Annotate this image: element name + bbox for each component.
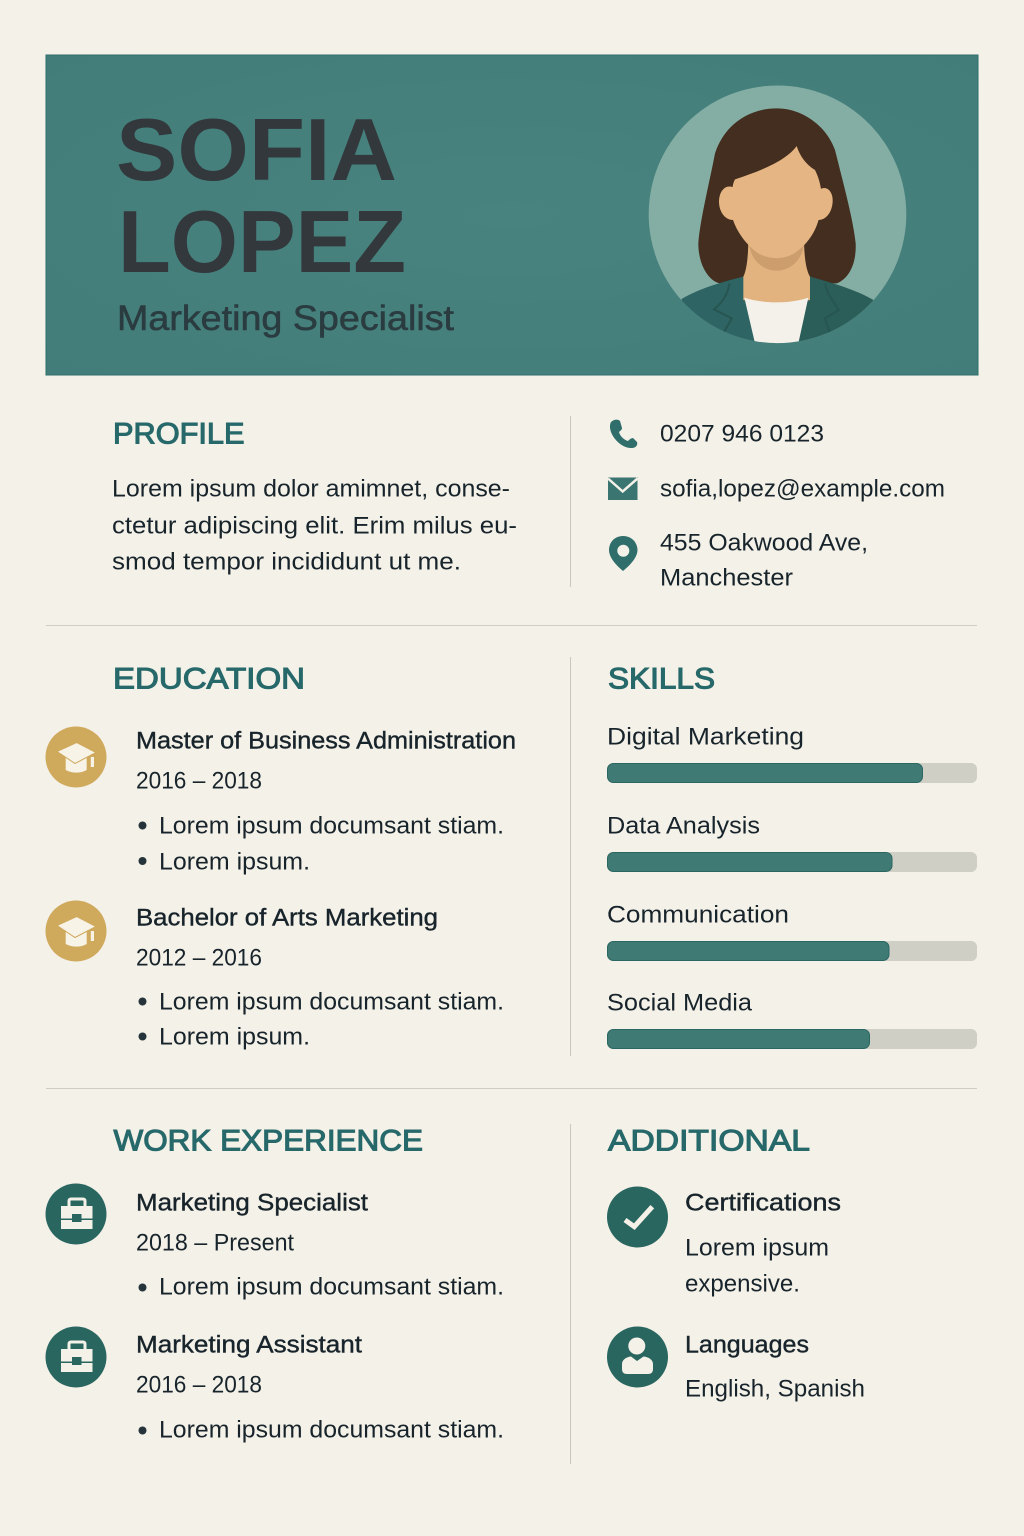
dates: 2012 – 2016 — [136, 944, 262, 971]
skill: communication — [607, 902, 977, 961]
bullet list: Lorem ipsum documsant stiam. — [159, 812, 504, 839]
panel: additional — [607, 1124, 865, 1402]
address: 455 Oakwood Ave, — [660, 530, 868, 557]
education entry: MBA — [46, 726, 516, 875]
profile text — [112, 476, 517, 576]
dates: 2016 – 2018 — [136, 767, 262, 794]
degree title: Bachelor of Arts Marketing — [136, 904, 438, 931]
icon: phone — [610, 420, 637, 448]
profile text: ctetur adipiscing elit. Erim milus eu- — [112, 513, 517, 540]
skill: data analysis: Data Analysis — [607, 812, 760, 840]
bullet list — [138, 988, 504, 1050]
panel: work experience — [46, 1124, 504, 1444]
bullet list: Lorem ipsum. — [159, 848, 310, 875]
name: SOFIA — [116, 100, 397, 199]
skill: social media — [607, 990, 977, 1049]
icon: briefcase — [46, 1184, 106, 1244]
certifications text — [685, 1234, 829, 1298]
phone number: 0207 946 0123 — [660, 421, 824, 448]
bullet list — [138, 812, 504, 875]
icon: graduation cap — [46, 726, 106, 788]
heading: skills: SKILLS — [608, 662, 715, 696]
heading: additional: ADDITIONAL — [608, 1124, 810, 1158]
panel: education — [46, 662, 516, 1050]
bullet: Lorem ipsum documsant stiam. — [159, 1274, 504, 1300]
skill: communication: Communication — [607, 902, 789, 928]
job entry: assistant — [46, 1326, 504, 1444]
icon: person — [607, 1326, 668, 1388]
heading: profile: PROFILE — [113, 418, 244, 450]
additional: certifications — [607, 1186, 841, 1298]
icon: location pin — [609, 536, 638, 571]
divider: work vertical — [570, 1124, 571, 1464]
email: sofia,lopez@example.com — [660, 476, 945, 503]
skill: digital marketing: Digital Marketing — [607, 724, 804, 750]
job title: Marketing Specialist — [136, 1190, 368, 1216]
skill: data analysis — [607, 812, 977, 872]
heading: education: EDUCATION — [113, 662, 305, 696]
dates: 2016 – 2018 — [136, 1372, 262, 1398]
bullet list: Lorem ipsum documsant stiam. — [159, 988, 504, 1015]
panel: contact — [608, 420, 945, 592]
divider: education vertical — [570, 657, 571, 1056]
degree title: Master of Business Administration — [136, 727, 516, 754]
panel: profile — [112, 418, 517, 576]
education entry: BA — [46, 900, 504, 1050]
profile text: smod tempor incididunt ut me. — [112, 549, 461, 576]
name: LOPEZ — [118, 192, 406, 291]
portrait — [649, 86, 906, 370]
job title: Marketing Specialist — [117, 299, 454, 338]
header banner — [46, 55, 978, 375]
divider: upper horizontal — [46, 625, 977, 626]
skill: social media: Social Media — [607, 990, 752, 1016]
divider: lower horizontal — [46, 1088, 977, 1089]
bullet: Lorem ipsum documsant stiam. — [159, 1416, 504, 1444]
address — [660, 530, 868, 592]
divider: profile vertical — [570, 416, 571, 587]
languages text: English, Spanish — [685, 1376, 865, 1402]
certifications title: Certifications — [685, 1190, 841, 1216]
name — [116, 100, 406, 291]
icon: graduation cap — [46, 900, 106, 962]
certifications text: expensive. — [685, 1270, 800, 1298]
certifications text: Lorem ipsum — [685, 1234, 829, 1262]
job title: Marketing Assistant — [136, 1332, 362, 1358]
additional: languages — [607, 1326, 865, 1402]
heading: work experience: WORK EXPERIENCE — [114, 1124, 423, 1158]
job entry: specialist — [46, 1184, 504, 1300]
icon: envelope — [608, 478, 638, 500]
panel: skills — [607, 662, 977, 1049]
icon: check mark — [607, 1186, 668, 1248]
icon: briefcase — [46, 1326, 106, 1388]
address: Manchester — [660, 565, 793, 592]
skill: digital marketing — [607, 724, 977, 783]
profile text: Lorem ipsum dolor amimnet, conse- — [112, 476, 510, 503]
bullet list: Lorem ipsum. — [159, 1023, 310, 1050]
languages title: Languages — [685, 1332, 809, 1358]
dates: 2018 – Present — [136, 1230, 294, 1257]
